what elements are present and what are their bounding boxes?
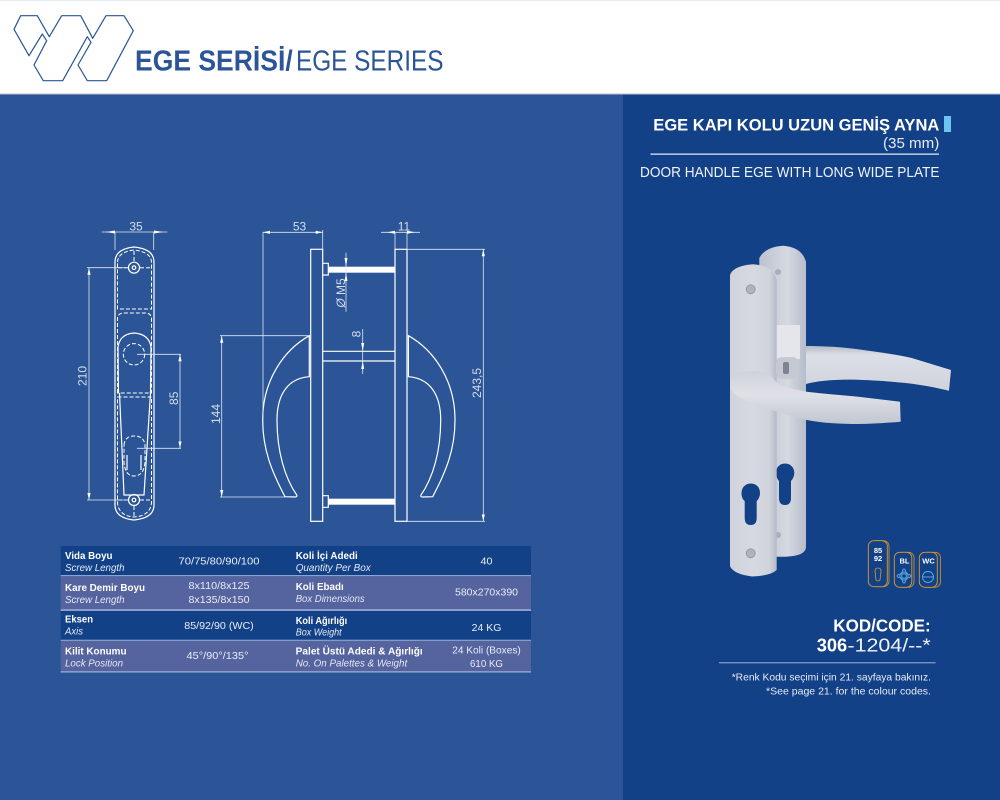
table row: axis: Box Weight bbox=[296, 628, 343, 638]
icon: company logo bbox=[14, 16, 133, 81]
dimension: M5 bbox=[334, 253, 348, 312]
inner dashed sections bbox=[118, 250, 152, 517]
front plate bbox=[730, 264, 777, 576]
front screws bbox=[746, 285, 755, 558]
product heading: EGE KAPI KOLU UZUN GENİŞ AYNA bbox=[653, 116, 939, 135]
icon: WC: WC bbox=[922, 556, 935, 566]
plate outline bbox=[115, 247, 154, 520]
handle outline bbox=[118, 333, 151, 495]
axis icons bbox=[868, 541, 940, 587]
table row: screw length: Screw Length bbox=[65, 563, 125, 574]
product code: -1204/--* bbox=[848, 635, 931, 656]
table row: square bar length: Screw Length bbox=[65, 595, 125, 606]
product heading: (35 mm) bbox=[883, 136, 939, 152]
dimension: 53 bbox=[263, 220, 323, 420]
table row: lock position: Lock Position bbox=[65, 658, 123, 670]
table row: axis bbox=[61, 611, 531, 641]
left background panel bbox=[0, 94, 623, 800]
table row: square bar length bbox=[61, 576, 531, 611]
table row: lock position: Palet Üstü Adedi & Ağırlığı bbox=[296, 644, 423, 658]
product heading bbox=[640, 116, 951, 181]
top screw bbox=[323, 263, 395, 275]
specification table bbox=[61, 546, 531, 672]
table row: square bar length: 8x110/8x125 bbox=[188, 580, 250, 592]
title: series name bbox=[135, 46, 444, 78]
spindle circle bbox=[123, 344, 145, 365]
dimension: 53: 53 bbox=[293, 220, 306, 234]
header band bbox=[0, 0, 1000, 94]
bottom screw bbox=[323, 496, 395, 507]
table row: axis: 85/92/90 (WC) bbox=[184, 620, 254, 632]
dimension: 11: 11 bbox=[398, 220, 411, 234]
dimension: 8: 8 bbox=[350, 330, 364, 337]
table row: lock position bbox=[61, 641, 531, 672]
table row: lock position: 45°/90°/135° bbox=[186, 650, 248, 662]
right background panel bbox=[623, 94, 1000, 800]
dimension: 144: 144 bbox=[209, 404, 223, 424]
title: series name: EGE SERİSİ/ bbox=[135, 46, 293, 78]
front handle bbox=[730, 371, 901, 424]
table row: screw length: 40 bbox=[480, 556, 493, 568]
product heading: DOOR HANDLE EGE WITH LONG WIDE PLATE bbox=[640, 165, 940, 181]
table row: lock position: 24 Koli (Boxes) bbox=[452, 644, 521, 656]
table row: lock position: No. On Palettes & Weight bbox=[296, 658, 408, 670]
dimension: 35 bbox=[102, 220, 167, 250]
table row: screw length bbox=[61, 546, 531, 576]
dimension: 243.5 bbox=[407, 249, 485, 521]
table row: lock position: 610 KG bbox=[470, 658, 503, 670]
technical drawing: side view bbox=[263, 249, 455, 521]
back plate highlight bbox=[776, 325, 800, 359]
table row: screw length: 70/75/80/90/100 bbox=[178, 556, 260, 568]
back handle bbox=[806, 346, 951, 391]
product code: 306 bbox=[817, 635, 847, 656]
table row: square bar length: 8x135/8x150 bbox=[188, 594, 250, 606]
table row: axis: Koli Ağırlığı bbox=[296, 616, 347, 627]
table row: screw length: Quantity Per Box bbox=[296, 563, 372, 574]
dimension: 8 bbox=[350, 329, 364, 374]
table row: axis: Axis bbox=[64, 626, 83, 638]
dimension: 11 bbox=[381, 220, 420, 249]
left handle bbox=[263, 336, 309, 497]
dimension: 35: 35 bbox=[129, 220, 143, 234]
table row: lock position: Kilit Konumu bbox=[65, 646, 126, 658]
table row: square bar length: Koli Ebadı bbox=[296, 582, 344, 593]
title: series name: EGE SERIES bbox=[296, 46, 444, 78]
technical drawing: front view bbox=[115, 247, 154, 520]
table row: axis: Eksen bbox=[65, 614, 93, 626]
dimension: 210: 210 bbox=[76, 366, 90, 386]
back keyhole bbox=[776, 464, 794, 505]
product photo: door handle bbox=[730, 246, 951, 576]
icon: 85/92 axis bbox=[868, 541, 889, 587]
icon: BL: BL bbox=[900, 556, 910, 566]
icon: 85/92 axis: 85 bbox=[874, 546, 882, 555]
right handle bbox=[408, 336, 455, 497]
dimension: 85: 85 bbox=[167, 391, 181, 405]
colour code note: *Renk Kodu seçimi için 21. sayfaya bakınız. bbox=[732, 672, 931, 684]
product code bbox=[719, 616, 936, 663]
front keyhole bbox=[742, 484, 760, 525]
dimension: M5: Ø M5 bbox=[334, 278, 348, 309]
table row: square bar length: Kare Demir Boyu bbox=[65, 583, 145, 594]
table row: screw length: Koli İçi Adedi bbox=[296, 549, 358, 562]
table row: screw length: Vida Boyu bbox=[65, 551, 112, 562]
colour code note bbox=[732, 672, 931, 698]
icon: 85/92 axis: 92 bbox=[874, 554, 882, 563]
colour code note: *See page 21. for the colour codes. bbox=[766, 686, 931, 698]
dimension: 144 bbox=[209, 336, 309, 497]
table row: axis: 24 KG bbox=[472, 622, 501, 634]
back plate screws bbox=[775, 269, 781, 538]
spindle bar bbox=[323, 351, 395, 361]
back plate bbox=[759, 246, 806, 557]
screws bbox=[118, 251, 151, 517]
plates bbox=[311, 249, 407, 521]
product code: KOD/CODE: bbox=[833, 616, 931, 636]
spindle rose bbox=[776, 357, 798, 379]
dimension: 243.5: 243,5 bbox=[470, 368, 484, 398]
cylinder keyhole bbox=[124, 436, 145, 476]
table row: square bar length: 580x270x390 bbox=[455, 586, 518, 598]
table row: square bar length: Box Dimensions bbox=[296, 594, 365, 605]
dimension: 210 bbox=[76, 268, 128, 500]
dimension: 85 bbox=[137, 354, 181, 448]
